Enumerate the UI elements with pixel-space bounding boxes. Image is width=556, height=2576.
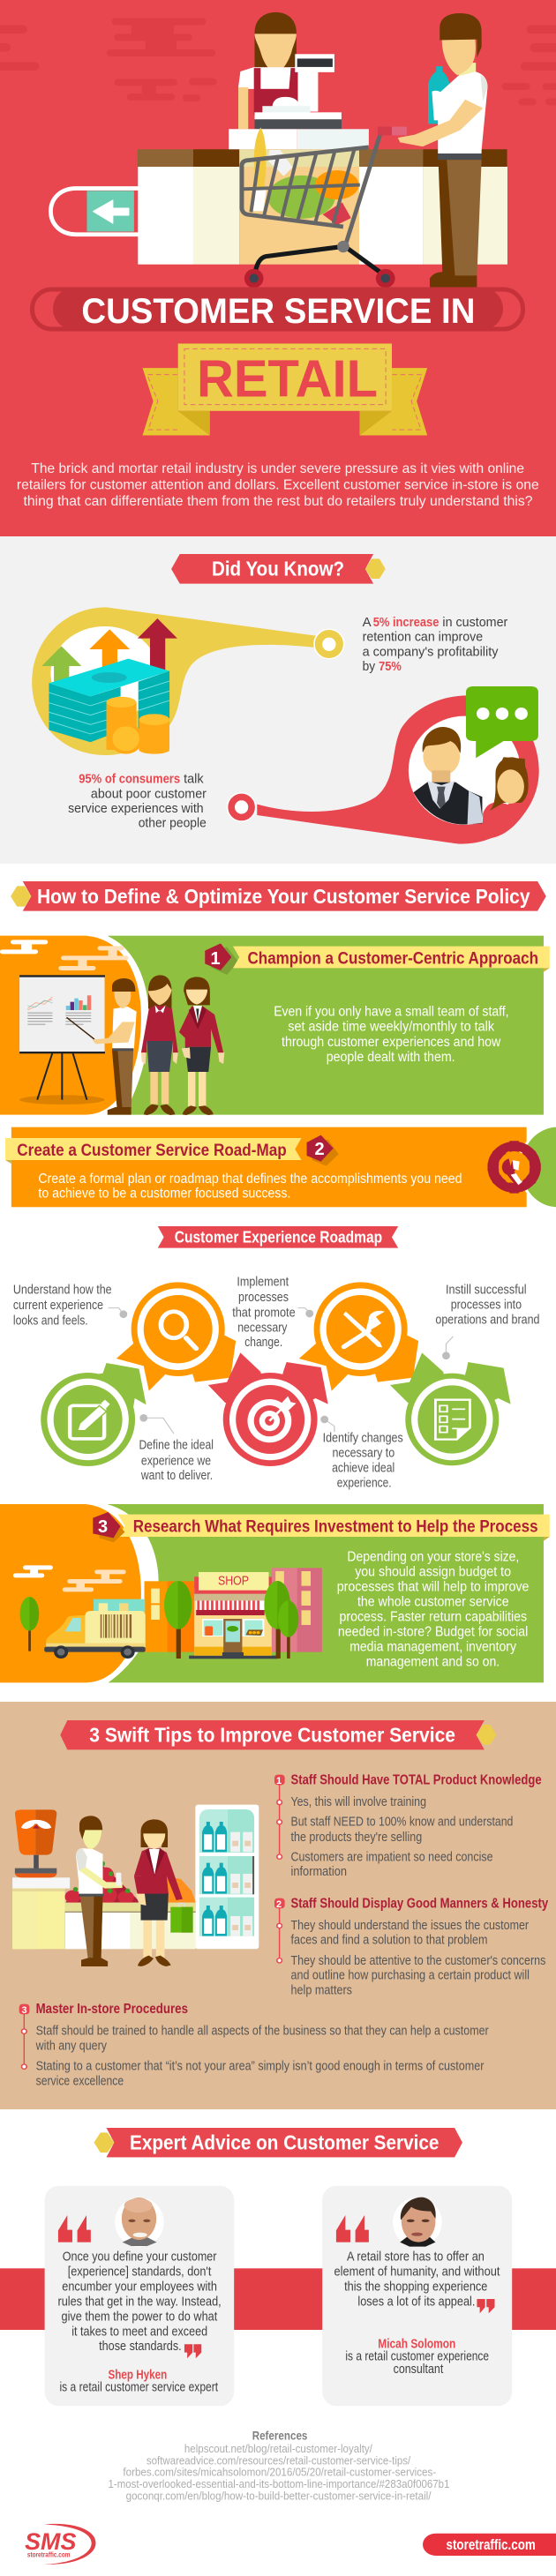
roadmap labels: experience we bbox=[141, 1454, 211, 1468]
step 4 orange bbox=[299, 1282, 418, 1391]
counter bbox=[138, 149, 507, 265]
references: References bbox=[252, 2429, 308, 2443]
staff woman bbox=[134, 1819, 193, 1966]
step 3 text: media management, inventory bbox=[349, 1639, 516, 1654]
text: 5% increase: A bbox=[363, 615, 372, 630]
step 3 text: needed in-store? Budget for social bbox=[338, 1624, 528, 1639]
roadmap labels: Define the ideal bbox=[139, 1439, 214, 1453]
tip 3: service excellence bbox=[36, 2074, 124, 2088]
title ribbon: Retail bbox=[143, 343, 427, 435]
references: 1-most-overlooked-essential-and-its-bottom-line-importance/#283a0f0067b1 bbox=[108, 2477, 449, 2490]
tip 3: with any query bbox=[35, 2039, 108, 2053]
title ribbon: Retail: RETAIL bbox=[197, 350, 378, 408]
step 1 text: Even if you only have a small team of staff, bbox=[274, 1005, 509, 1020]
text: 5% increase: by bbox=[363, 659, 376, 674]
panel: expert advice bbox=[0, 2128, 556, 2406]
roadmap diagram bbox=[13, 1276, 539, 1491]
panel: did you know bbox=[0, 536, 556, 864]
cash register bbox=[229, 54, 369, 149]
text: 5% increase: 75% bbox=[379, 659, 402, 674]
tip 2: faces and find a solution to that problem bbox=[291, 1934, 487, 1948]
step 3 text bbox=[337, 1549, 530, 1669]
scale bbox=[12, 1809, 70, 1949]
tip 1: 1 bbox=[276, 1776, 282, 1786]
step 1 text bbox=[274, 1005, 509, 1065]
tip 1: the products they're selling bbox=[291, 1831, 422, 1845]
card: Shep Hyken bbox=[45, 2186, 234, 2406]
attribution: consultant bbox=[394, 2362, 444, 2377]
quote text bbox=[58, 2250, 222, 2354]
attribution bbox=[345, 2336, 489, 2377]
panel: swift tips bbox=[0, 1702, 556, 2109]
heading: did you know bbox=[171, 554, 386, 584]
attribution: Shep Hyken bbox=[108, 2367, 167, 2382]
icon: exit sign bbox=[50, 189, 139, 235]
roadmap labels: achieve ideal bbox=[332, 1462, 394, 1476]
tip 2 bbox=[274, 1896, 548, 1997]
fridge bbox=[195, 1805, 259, 1949]
text: 5% increase: 5% increase bbox=[373, 615, 439, 630]
text: 5% increase: in customer bbox=[442, 615, 507, 630]
staff man bbox=[76, 1816, 123, 1966]
step 2 text: Create a formal plan or roadmap that defines the accomplishments you need bbox=[38, 1172, 462, 1187]
panel: step 2 roadmap: 2 bbox=[314, 1140, 325, 1159]
step 1 text: people dealt with them. bbox=[327, 1050, 455, 1065]
step title 2: Create a Customer Service Road-Map bbox=[17, 1142, 287, 1160]
tip 3: Master In-store Procedures bbox=[36, 2002, 188, 2017]
references: forbes.com/sites/micahsolomon/2016/05/20/retail-customer-services- bbox=[123, 2466, 436, 2479]
step 2 orange bbox=[116, 1282, 236, 1391]
intro text: thing that can differentiate them from the rest but do retailers truly understand this? bbox=[23, 494, 533, 509]
badge 1 bbox=[205, 943, 550, 975]
logo: SMS storetraffic: storetraffic.com bbox=[27, 2551, 70, 2558]
panel: hero bbox=[0, 0, 556, 536]
heading: swift tips: 3 Swift Tips to Improve Customer Service bbox=[89, 1723, 455, 1746]
woman right bbox=[188, 1072, 195, 1106]
roadmap labels: want to deliver. bbox=[140, 1469, 213, 1483]
roadmap labels: operations and brand bbox=[435, 1314, 540, 1328]
shopping cart bbox=[242, 127, 407, 288]
text: 95% of consumers: service experiences with bbox=[68, 801, 204, 816]
roadmap labels: change. bbox=[244, 1336, 282, 1350]
cashier bbox=[238, 12, 312, 129]
references: helpscout.net/blog/retail-customer-loyalty/ bbox=[184, 2442, 372, 2455]
quote text: give them the power to do what bbox=[62, 2310, 218, 2325]
produce counter bbox=[65, 1861, 196, 1949]
roadmap labels bbox=[13, 1276, 539, 1491]
references bbox=[108, 2429, 449, 2502]
step 3 text: you should assign budget to bbox=[355, 1564, 511, 1579]
references: goconqr.com/en/blog/how-to-build-better-customer-service-in-retail/ bbox=[126, 2489, 432, 2502]
step 1 green bbox=[41, 1363, 147, 1466]
roadmap labels: Instill successful bbox=[446, 1283, 527, 1297]
text: 95% of consumers: other people bbox=[139, 816, 207, 831]
roadmap labels: that promote bbox=[232, 1306, 296, 1320]
quote text: [experience] standards, don't bbox=[68, 2264, 212, 2279]
text: 5% increase: a company's profitability bbox=[363, 644, 499, 659]
presentation illustration bbox=[0, 936, 544, 1115]
heading: customer experience roadmap: Customer Experience Roadmap bbox=[175, 1228, 382, 1246]
step 1 text: set aside time weekly/monthly to talk bbox=[288, 1020, 494, 1035]
step 2 text bbox=[38, 1172, 462, 1202]
badge 1: 1 bbox=[210, 949, 221, 969]
intro text bbox=[17, 461, 539, 509]
attribution: is a retail customer service expert bbox=[60, 2380, 219, 2395]
panel: step 1 champion bbox=[0, 936, 550, 1115]
heading: expert advice bbox=[94, 2128, 462, 2157]
text: 95% of consumers: 95% of consumers bbox=[79, 772, 180, 787]
text: 5% increase: retention can improve bbox=[363, 630, 483, 645]
panel: step 2 roadmap bbox=[5, 1123, 556, 1211]
roadmap labels: necessary bbox=[237, 1321, 288, 1335]
text: 5% increase bbox=[363, 615, 507, 674]
tip 3: Stating to a customer that “it’s not your area” simply isn’t good enough in terms of customer bbox=[36, 2060, 485, 2074]
shop sign text: SHOP bbox=[218, 1574, 249, 1589]
attribution: is a retail customer experience bbox=[345, 2349, 489, 2364]
shop counter illustration bbox=[12, 1805, 259, 1966]
quote text: rules that get in the way. Instead, bbox=[58, 2295, 222, 2310]
woman left bbox=[148, 975, 171, 1008]
step 3 text: management and so on. bbox=[366, 1654, 500, 1669]
logo: SMS storetraffic bbox=[25, 2524, 95, 2565]
step 3 text: the whole customer service bbox=[357, 1595, 509, 1610]
tip 1: information bbox=[291, 1865, 347, 1879]
roadmap labels: current experience bbox=[13, 1299, 103, 1313]
step 2 text: to achieve to be a customer focused success. bbox=[38, 1187, 290, 1202]
attribution: Micah Solomon bbox=[378, 2336, 455, 2351]
roadmap labels: experience. bbox=[337, 1477, 392, 1491]
portrait and quote marks bbox=[336, 2198, 495, 2313]
tip 3: Staff should be trained to handle all aspects of the business so that they can help a customer bbox=[36, 2025, 489, 2039]
tip 1: Yes, this will involve training bbox=[291, 1795, 426, 1809]
tip 2: help matters bbox=[291, 1983, 352, 1997]
title: Customer Service In: CUSTOMER SERVICE IN bbox=[81, 292, 475, 331]
step 3 text: Depending on your store's size, bbox=[347, 1549, 519, 1564]
quote text: element of humanity, and without bbox=[334, 2264, 500, 2279]
tip 3: 3 bbox=[21, 2005, 27, 2016]
heading: expert advice: Expert Advice on Customer Service bbox=[130, 2131, 439, 2154]
quote text: Once you define your customer bbox=[63, 2250, 217, 2265]
quote text: loses a lot of its appeal. bbox=[357, 2295, 475, 2310]
customer bbox=[398, 13, 487, 288]
tip 3 bbox=[19, 2002, 489, 2088]
intro text: retailers for customer attention and dollars. Excellent customer service in-store is one bbox=[17, 478, 539, 492]
step 3 text: process. Faster return capabilities bbox=[339, 1609, 527, 1624]
quote text: A retail store has to offer an bbox=[347, 2250, 485, 2265]
roadmap labels: looks and feels. bbox=[13, 1314, 88, 1328]
step 5 green bbox=[390, 1352, 511, 1465]
roadmap labels: Identify changes bbox=[323, 1431, 403, 1445]
card: Micah Solomon bbox=[322, 2186, 512, 2406]
text: 95% of consumers: talk bbox=[184, 772, 204, 787]
tip 1 bbox=[274, 1772, 542, 1879]
connector lines bbox=[109, 1308, 454, 1434]
tip 1: Customers are impatient so need concise bbox=[291, 1850, 492, 1864]
graphic: money and arrows bbox=[32, 607, 344, 755]
roadmap labels: necessary to bbox=[332, 1446, 394, 1460]
roadmap labels: processes into bbox=[451, 1298, 522, 1312]
website pill bbox=[423, 2534, 556, 2556]
step 3 text: processes that will help to improve bbox=[337, 1580, 530, 1595]
tip 2: 2 bbox=[276, 1899, 282, 1910]
hero illustration bbox=[0, 12, 556, 288]
quote text: this the shopping experience bbox=[344, 2279, 487, 2294]
graphic: people talking bbox=[228, 686, 539, 844]
quote text bbox=[334, 2250, 500, 2310]
quote text: it takes to meet and exceed bbox=[71, 2324, 207, 2339]
logo: SMS storetraffic: SMS bbox=[25, 2528, 76, 2555]
text: 95% of consumers: about poor customer bbox=[91, 786, 207, 801]
step 1 text: through customer experiences and how bbox=[282, 1035, 501, 1050]
step 3 red bbox=[208, 1352, 328, 1466]
panel: step 3 research bbox=[0, 1504, 550, 1682]
heading: did you know: Did You Know? bbox=[212, 558, 344, 580]
roadmap labels: Implement bbox=[237, 1276, 289, 1290]
attribution bbox=[60, 2367, 219, 2395]
tip 1: But staff NEED to 100% know and understand bbox=[291, 1815, 513, 1829]
quote text: encumber your employees with bbox=[62, 2279, 217, 2294]
icon: gear and wrench bbox=[487, 1141, 541, 1194]
roadmap labels: Understand how the bbox=[13, 1284, 112, 1298]
portrait and quote marks bbox=[58, 2198, 201, 2358]
roadmap labels: processes bbox=[238, 1291, 289, 1305]
intro text: The brick and mortar retail industry is under severe pressure as it vies with online bbox=[31, 461, 524, 476]
shop and truck illustration bbox=[0, 1504, 550, 1682]
quote text: those standards. bbox=[99, 2339, 182, 2354]
text: 95% of consumers bbox=[68, 772, 207, 831]
panel: step 3 research: 3 bbox=[98, 1517, 108, 1537]
references: softwareadvice.com/resources/retail-customer-service-tips/ bbox=[147, 2453, 411, 2467]
